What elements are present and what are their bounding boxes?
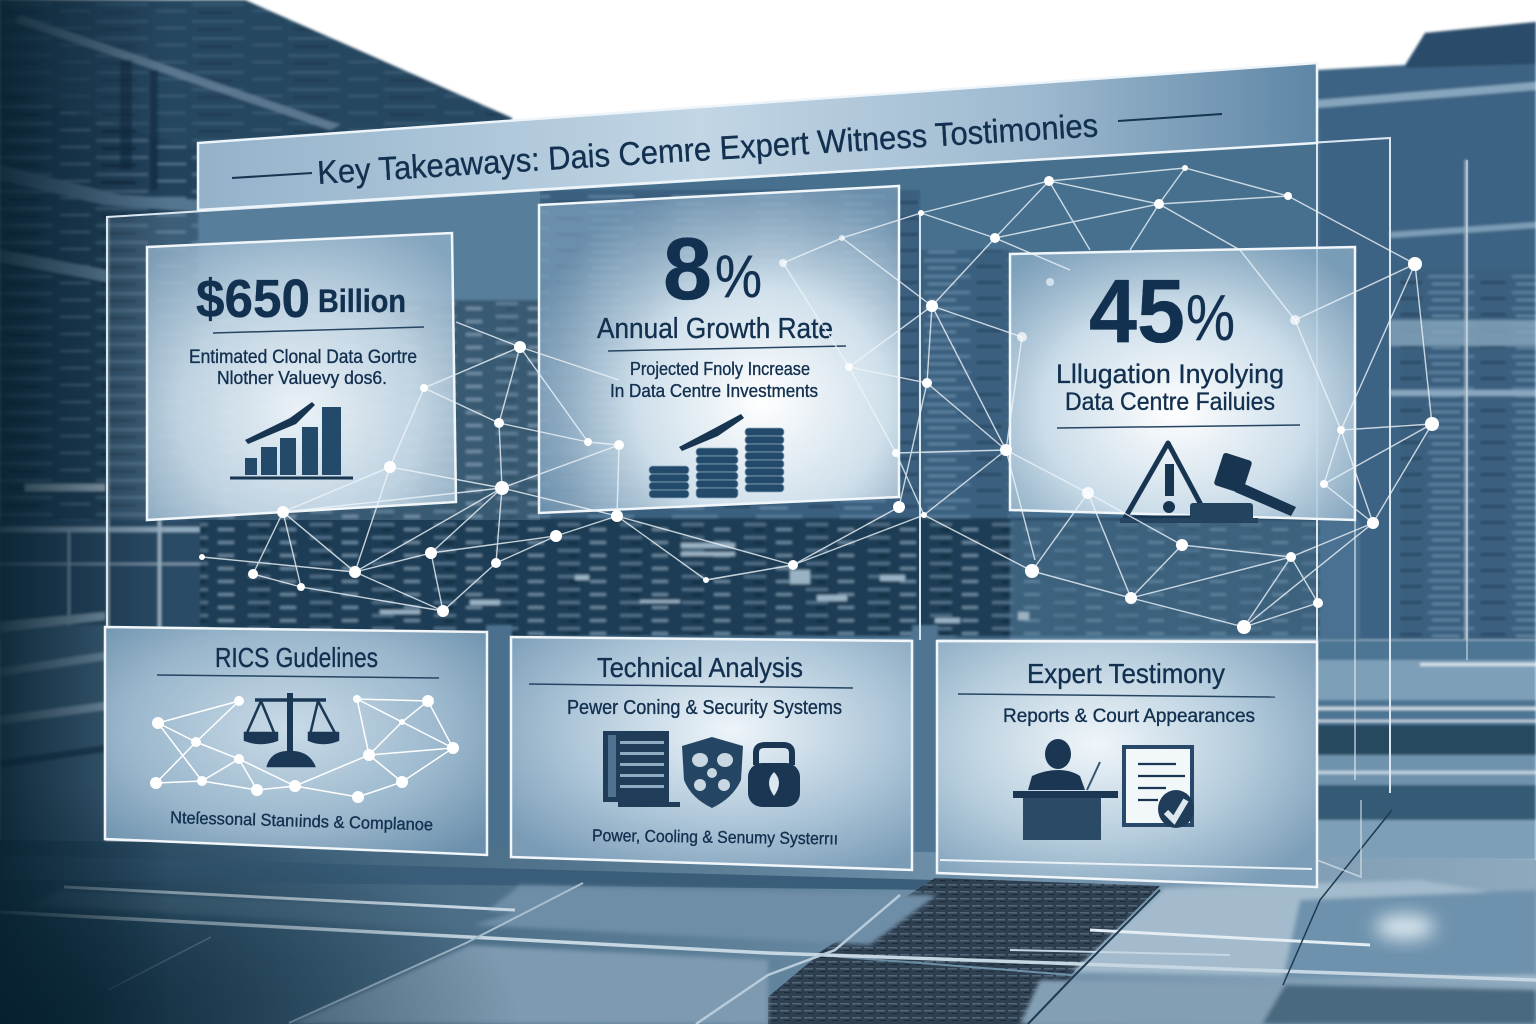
caption: Power, Cooling & Senumy Systerrıı [592,826,838,848]
description: Pewer Coning & Security Systems [567,697,842,719]
stat: $650 [196,269,310,329]
heading: Technical Analysis [597,652,803,683]
vignette [0,0,170,1024]
heading: Expert Testimony [1027,658,1225,689]
rule [529,684,853,688]
stat [663,219,762,318]
icon: scales [245,693,338,766]
rule [157,675,439,678]
icon: coin stacks [649,414,784,498]
panel: $650 billion [147,233,456,520]
panel: 45% litigation [1010,247,1355,523]
panel: expert testimony [937,641,1317,887]
panel: technical analysis [511,637,912,870]
stat: 8 [663,219,712,318]
stat [196,269,406,329]
icon: shield [682,737,743,808]
icon: gavel [1120,452,1296,523]
description: Nlother Valuevy dos6. [217,368,387,388]
panel: 8% growth [539,186,899,513]
description: In Data Centre Investments [610,381,818,401]
network lines [202,168,1432,627]
floor: highlight [1375,915,1435,939]
description [189,347,417,388]
floor [0,810,1536,1024]
panel: RICS guidelines [105,627,487,855]
network nodes [199,165,1439,634]
rule [213,327,424,333]
icon: witness at desk [1013,739,1118,840]
frame backdrop [107,190,540,640]
panel: glass back frame [107,63,1467,887]
stat: % [715,243,762,310]
lit windows [380,543,1029,623]
stat: % [1186,281,1235,354]
stat: 45 [1089,262,1185,362]
rule [1057,425,1300,428]
floor: lines [0,810,1536,1024]
heading: RICS Gudelines [215,642,378,673]
description: Projected Fnoly Increase [630,359,810,379]
icon: document with check [1124,747,1194,828]
icon: bar chart [230,402,353,478]
caption: Nteſessonal Stanıinds & Complanoe [170,808,433,834]
building: left [0,0,512,640]
floor: dark carpet [768,878,1160,1024]
network [150,695,459,803]
building: right [1317,22,1536,660]
description: Reports & Court Appearances [1003,706,1255,727]
title: Key Takeaways: Dais Cemre Expert Witness Tostimonies [316,106,1099,191]
rule [958,694,1275,697]
icon: server rack [603,731,680,807]
title rules [232,114,1222,178]
stat: Billion [318,283,406,319]
heading [1056,359,1284,416]
heading: Lllugation Inyolying [1056,359,1284,389]
panel: title banner [198,63,1317,210]
heading: Data Centre Failuies [1065,388,1275,416]
description: Entimated Clonal Data Gortre [189,347,417,368]
floor: glass tiles [30,880,1536,1024]
description [610,359,818,401]
back wall [198,130,1360,640]
heading: Annual Growth Rate [597,313,833,345]
icon: warning triangle [1125,443,1208,518]
icon: padlock [748,745,800,807]
lower wall [0,217,1536,880]
rule [608,346,846,351]
stat [1089,262,1235,362]
